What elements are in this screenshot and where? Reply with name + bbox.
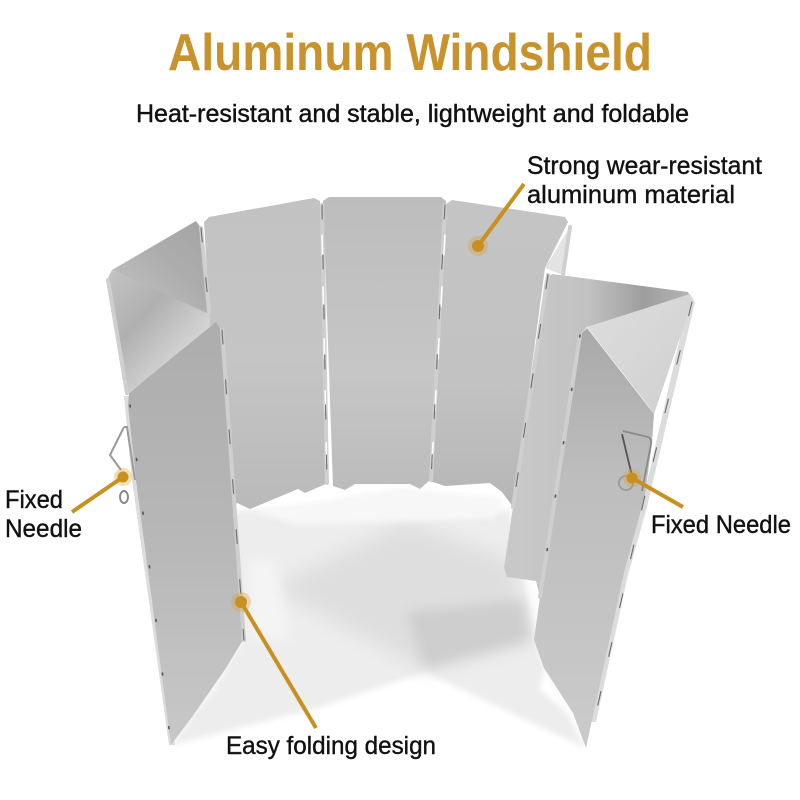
- panel: front right outer edge strip: [590, 294, 695, 722]
- callout: fixed needle left: Needle: [5, 515, 82, 543]
- hinges: [108, 205, 692, 745]
- callout: fixed needle left: Fixed: [5, 486, 63, 514]
- panel: back left fold, shiny inner: [107, 270, 219, 394]
- panel: front left outer edge strip: [124, 396, 175, 745]
- sliver: bright fold behind fourth panel: [545, 227, 570, 275]
- callout: strong wear-resistant aluminum material: Strong wear-resistant: [527, 152, 762, 180]
- icon: left fixed needle wire: [110, 427, 135, 503]
- callout: easy folding design: Easy folding design: [226, 732, 436, 760]
- panel: second from left: [204, 198, 328, 518]
- callout: strong wear-resistant aluminum material: aluminum material: [527, 181, 735, 209]
- callout: fixed needle left: [5, 468, 132, 543]
- panel: centre: [323, 197, 446, 490]
- floor shadow: [172, 488, 585, 748]
- callout: fixed needle right: Fixed Needle: [651, 511, 791, 539]
- panel: front right: [534, 328, 654, 748]
- panel: right back fold: [504, 274, 690, 597]
- panel: fourth, upper-right strong aluminum: [430, 200, 568, 507]
- callout: easy folding design: [226, 592, 436, 760]
- callout: fixed needle right: [623, 469, 791, 539]
- icon: right fixed needle wire: [619, 431, 651, 491]
- callout: strong wear-resistant aluminum material: [468, 152, 762, 256]
- title: Aluminum Windshield: [168, 24, 652, 82]
- panel: back left fold, upper: [112, 221, 218, 319]
- subtitle: Heat-resistant and stable, lightweight and foldable: [136, 100, 689, 128]
- panel: front left: [128, 322, 243, 745]
- panel: front right bright fold: [587, 294, 692, 414]
